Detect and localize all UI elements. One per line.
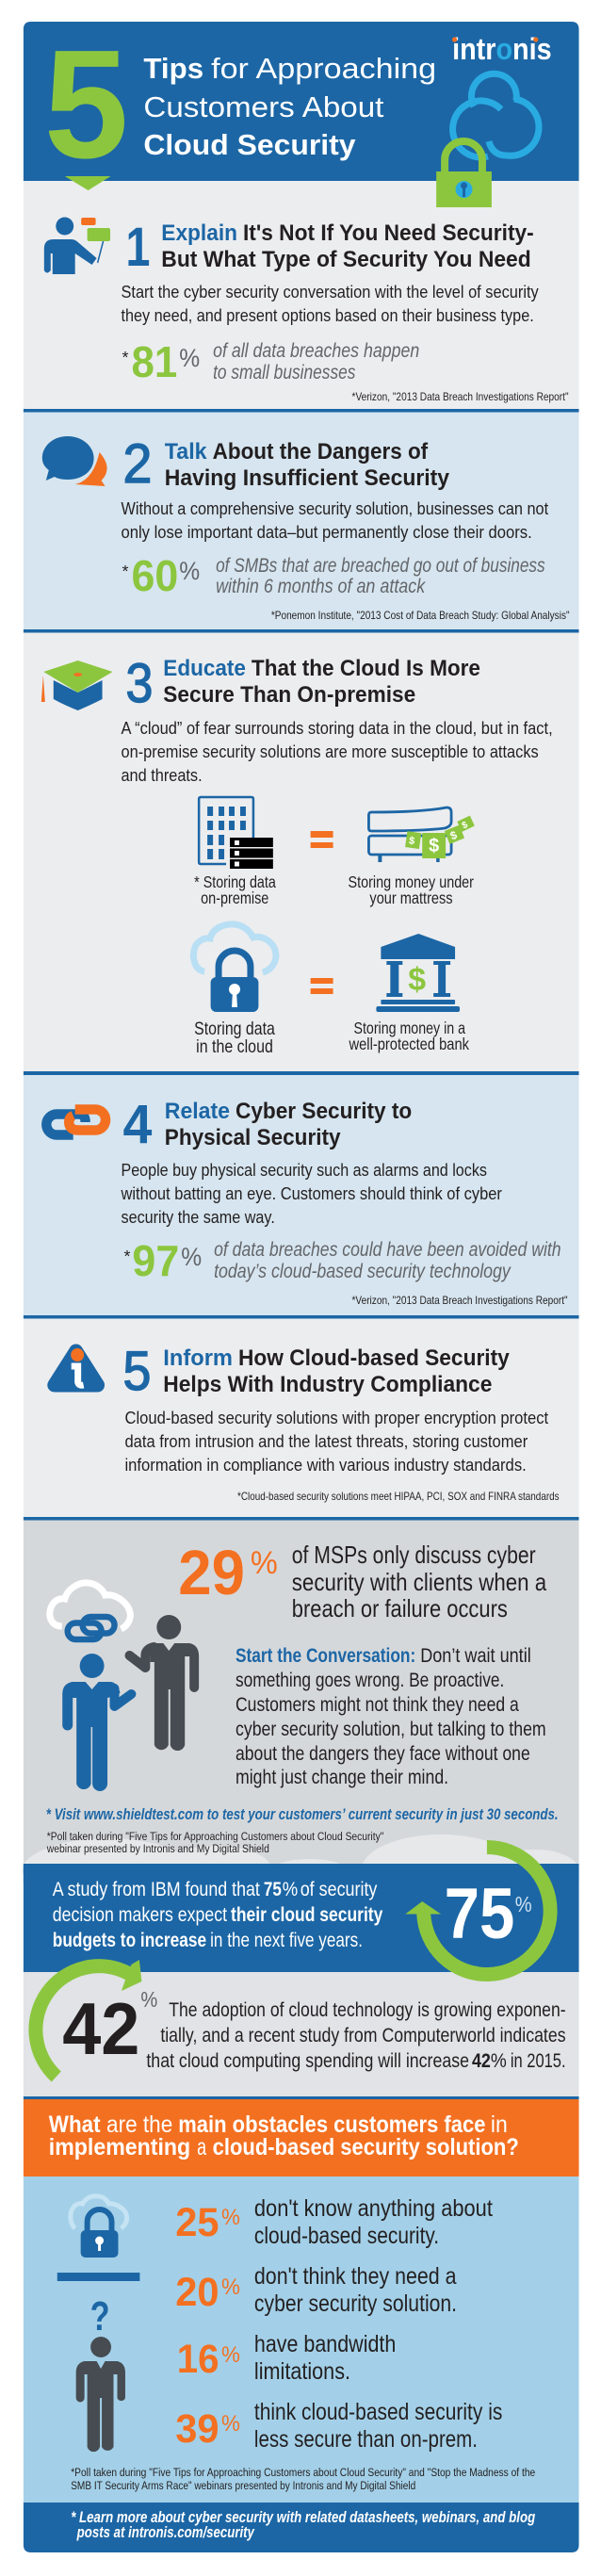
icon: cloud with padlock [193, 924, 276, 1012]
panel: tip 5 inform [24, 1315, 579, 1518]
icon: presenter with speech bubbles [44, 217, 110, 274]
text: start the conversation: Start the Conversation: [236, 1645, 415, 1667]
panel: tip 3 educate [24, 629, 579, 1071]
stat description: breach or failure occurs [292, 1596, 508, 1622]
number 3: 3 [125, 654, 153, 714]
citation: tip 5: *Cloud-based security solutions meet HIPAA, PCI, SOX and FINRA standards [237, 1492, 560, 1503]
stat: 75 percent: % [515, 1892, 532, 1916]
stat: 97 percent [123, 1236, 561, 1285]
stat: 81 percent: to small businesses [213, 362, 356, 383]
body text: tip 3 [121, 718, 553, 785]
stat: 29 percent: 29 [178, 1538, 245, 1608]
title: for Approaching [211, 52, 436, 85]
label: storing money in a bank [349, 1019, 469, 1053]
stat description: security with clients when a [292, 1570, 547, 1596]
big number 5: 5 [44, 18, 128, 190]
stat row: 20 percent: cyber security solution. [254, 2291, 457, 2317]
stat: 81 percent [122, 337, 419, 386]
stat row: 25 percent [175, 2195, 493, 2249]
body text: tip 5: Cloud-based security solutions with proper encryption protect [124, 1408, 548, 1427]
heading: tip 1: Explain [161, 220, 237, 246]
stat: 81 percent: * [122, 348, 128, 367]
text: IBM study: budgets to increase [53, 1930, 206, 1951]
number 4: 4 [122, 1095, 152, 1155]
icon: bank [376, 934, 460, 1012]
stat: 75 percent: 75 [445, 1874, 514, 1954]
text: computerworld study [146, 1999, 566, 2072]
stat row: 20 percent [175, 2263, 457, 2317]
text: computerworld study: in 2015. [511, 2050, 566, 2072]
text: IBM study: of security [300, 1879, 378, 1900]
body text: tip 4: security the same way. [121, 1207, 275, 1227]
text: start the conversation: about the dangers they face without one [236, 1743, 530, 1765]
heading: main obstacles question: in [491, 2111, 508, 2138]
panel: obstacles list [24, 2177, 579, 2503]
stat row: 25 percent: cloud-based security. [254, 2223, 439, 2249]
footnote: poll [46, 1830, 383, 1855]
text: computerworld study: 42 [472, 2050, 491, 2072]
icon: bank: $ [408, 962, 426, 998]
body text: tip 2: only lose important data–but permanently close their doors. [121, 522, 532, 542]
equals sign: cloud [311, 978, 333, 994]
heading: main obstacles question: are the [106, 2111, 172, 2138]
panel: IBM stat band [24, 1864, 579, 1972]
stat row: 20 percent: 20 [175, 2270, 219, 2315]
body text: tip 5 [124, 1408, 548, 1475]
title: About [302, 90, 384, 123]
icon: mattress with money: $ [429, 836, 439, 856]
footer call to action: posts at intronis.com/security [76, 2524, 255, 2541]
stat row: 25 percent: don't know anything about [254, 2195, 493, 2222]
citation: tip 4: *Verizon, "2013 Data Breach Investigations Report" [352, 1296, 568, 1307]
text: start the conversation: might just change their mind. [236, 1767, 448, 1788]
label: storing data on-premise [194, 872, 276, 907]
stat row: 16 percent: % [221, 2342, 240, 2368]
stat row: 20 percent: % [221, 2274, 240, 2300]
heading: main obstacles question: What [49, 2111, 101, 2138]
icon: cloud outline [453, 73, 539, 157]
body text: tip 2 [121, 498, 548, 542]
label: storing money in a bank: well-protected bank [349, 1035, 469, 1053]
stat row: 20 percent: don't think they need a [254, 2263, 457, 2290]
stat: 60 percent: within 6 months of an attack [216, 576, 426, 597]
divider bar [57, 2273, 139, 2281]
heading: tip 2: Talk [165, 439, 207, 465]
body text: tip 4 [121, 1160, 502, 1227]
stat row: 39 percent [175, 2399, 502, 2453]
text: computerworld study: % [491, 2050, 507, 2072]
heading: tip 1: It's Not If You Need Security- [243, 220, 534, 246]
text: computerworld study: that cloud computing spending will increase [146, 2050, 469, 2072]
stat row: 16 percent: have bandwidth [254, 2331, 396, 2357]
body text: tip 3: A “cloud” of fear surrounds storing data in the cloud, but in fact, [121, 718, 553, 738]
text: start the conversation: Don’t wait until [420, 1645, 531, 1667]
label: storing money in a bank: Storing money in a [353, 1019, 465, 1037]
stat: 81 percent: 81 [131, 337, 177, 386]
icon: mattress with money: $ [448, 828, 460, 842]
text: IBM study: 75 [264, 1879, 282, 1900]
text: IBM study: decision makers expect [53, 1904, 227, 1926]
heading: tip 5: Inform [163, 1345, 233, 1371]
panel: MSP conversation [23, 1517, 579, 1906]
heading: main obstacles question: cloud-based security solution? [213, 2134, 519, 2160]
label: storing data in the cloud: in the cloud [196, 1037, 273, 1057]
stat row: 39 percent: % [221, 2411, 240, 2437]
body text: tip 4: without batting an eye. Customers should think of cyber [121, 1183, 502, 1203]
label: storing money under mattress [349, 872, 474, 907]
icon: building with servers [199, 797, 273, 869]
icon: mattress with money: $ [408, 835, 415, 847]
stat row: 16 percent [177, 2331, 396, 2385]
body text: tip 3: on-premise security solutions are more susceptible to attacks [121, 742, 539, 761]
icon: chain link [46, 1110, 106, 1134]
heading: tip 3: Educate [163, 656, 246, 681]
text: IBM study: A study from IBM found that [53, 1879, 260, 1900]
equals sign: on-premise [311, 831, 333, 848]
stat: 29 percent: % [251, 1545, 278, 1581]
icon: mattress with money: $ [461, 820, 470, 831]
pointer triangle [65, 176, 111, 190]
stat description: of MSPs only discuss cyber [292, 1542, 536, 1569]
footnote: webinar poll [71, 2466, 536, 2492]
label: storing data on-premise: * Storing data [194, 872, 276, 891]
background clouds [23, 1834, 579, 1906]
body text: tip 3: and threats. [121, 765, 203, 785]
text: IBM study: % [283, 1879, 298, 1900]
stat: 97 percent: today’s cloud-based security technology [214, 1261, 512, 1282]
panel: tip 1 explain [24, 179, 579, 410]
footnote: webinar poll: SMB IT Security Arms Race" webinars presented by Intronis and My Digital Shield [71, 2479, 415, 2492]
heading: tip 5: Helps With Industry Compliance [163, 1372, 492, 1397]
label: storing data on-premise: on-premise [201, 889, 268, 907]
heading: tip 4: Cyber Security to [236, 1099, 412, 1124]
heading: main obstacles question: implementing [49, 2134, 190, 2160]
stat: 60 percent: 60 [131, 551, 178, 600]
stat: 81 percent: % [179, 344, 200, 372]
text: start the conversation: something goes wrong. Be proactive. [236, 1670, 504, 1691]
number 2: 2 [122, 434, 152, 495]
heading: tip 3: That the Cloud Is More [252, 656, 480, 681]
body text: tip 5: information in compliance with various industry standards. [124, 1455, 527, 1475]
stat: 60 percent [122, 551, 545, 600]
text: start the conversation: cyber security solution, but talking to them [236, 1719, 546, 1740]
heading: tip 4: Relate [165, 1099, 230, 1124]
heading: tip 4: Physical Security [165, 1125, 341, 1150]
body text: tip 1: Start the cyber security conversation with the level of security [121, 282, 539, 302]
panel: tip 4 relate [24, 1071, 579, 1316]
heading: tip 3 [163, 656, 480, 708]
icon: grey person [129, 1615, 199, 1751]
heading: tip 2: About the Dangers of [213, 439, 429, 465]
footnote: poll: *Poll taken during "Five Tips for Approaching Customers about Cloud Security" [47, 1830, 383, 1843]
text: start the conversation: Customers might not think they need a [236, 1694, 519, 1716]
heading: tip 2: Having Insufficient Security [165, 465, 450, 491]
stat: 81 percent: of all data breaches happen [213, 340, 419, 362]
citation: tip 2: *Ponemon Institute, "2013 Cost of Data Breach Study: Global Analysis" [271, 611, 570, 622]
title: Customers [143, 90, 295, 123]
label: storing data in the cloud [194, 1019, 275, 1057]
number 5: 5 [122, 1342, 151, 1402]
logo: intronis: intronis [452, 32, 552, 66]
icon: person [76, 2337, 125, 2452]
heading: tip 5 [163, 1345, 510, 1397]
footer panel [24, 2503, 579, 2552]
icon: blue person [62, 1654, 131, 1791]
icon: circular arrow 42 percent [36, 1960, 141, 2077]
stat row: 39 percent: 39 [175, 2406, 219, 2452]
stat row: 25 percent: % [221, 2205, 240, 2230]
body text: tip 2: Without a comprehensive security solution, businesses can not [121, 498, 548, 518]
text: IBM study: their cloud security [231, 1904, 383, 1926]
title: Tips [143, 52, 203, 85]
stat: 42 percent: % [140, 1987, 157, 2012]
title: Cloud Security [143, 128, 356, 161]
stat row: 16 percent: 16 [177, 2337, 219, 2382]
stat: 97 percent: 97 [132, 1236, 179, 1285]
stat: 97 percent: % [181, 1243, 202, 1271]
panel: tip 2 talk [24, 409, 579, 630]
heading: tip 3: Secure Than On-premise [163, 682, 415, 708]
icon: mattress with money [368, 807, 475, 862]
icon: cloud with chain link [50, 1583, 130, 1639]
body text: tip 1: they need, and present options based on their business type. [121, 305, 534, 325]
stat row: 39 percent: think cloud-based security is [254, 2399, 502, 2425]
stat row: 39 percent: less secure than on-prem. [254, 2426, 478, 2453]
body text: tip 4: People buy physical security such as alarms and locks [121, 1160, 487, 1180]
footnote: poll: webinar presented by Intronis and My Digital Shield [46, 1842, 269, 1855]
stat description [292, 1542, 547, 1622]
footnote: webinar poll: *Poll taken during "Five Tips for Approaching Customers about Cloud Security" and "Stop the Madness of the [71, 2466, 536, 2479]
body text: tip 1 [121, 282, 539, 325]
icon: circular arrow 75 percent [405, 1847, 550, 1974]
heading: main obstacles question [49, 2111, 519, 2160]
heading: main obstacles question: a [197, 2134, 206, 2160]
text: IBM study [53, 1879, 383, 1951]
icon: green padlock [436, 141, 492, 207]
text: start the conversation [236, 1645, 546, 1788]
icon: info triangle [55, 1348, 98, 1385]
heading: main obstacles question: main obstacles customers face [178, 2111, 486, 2138]
citation: tip 1: *Verizon, "2013 Data Breach Investigations Report" [352, 392, 569, 403]
stat: 60 percent: * [122, 562, 128, 580]
heading: tip 5: How Cloud-based Security [238, 1345, 510, 1371]
label: storing money under mattress: your mattress [369, 889, 453, 907]
text: IBM study: in the next five years. [210, 1930, 363, 1951]
heading: tip 1: But What Type of Security You Need [161, 247, 531, 272]
stat: 42 percent: 42 [62, 1989, 139, 2070]
header panel [24, 18, 579, 207]
heading: tip 1 [161, 220, 534, 272]
stat: 97 percent: * [123, 1247, 130, 1265]
label: storing money under mattress: Storing money under [349, 872, 474, 891]
panel: obstacles heading [24, 2096, 579, 2177]
stat: 60 percent: % [179, 557, 200, 585]
body text: tip 5: data from intrusion and the latest threats, storing customer [124, 1431, 528, 1451]
title [143, 52, 436, 161]
icon: graduation cap [41, 660, 113, 710]
footer call to action [71, 2509, 535, 2541]
heading: tip 4 [165, 1099, 412, 1150]
label: storing data in the cloud: Storing data [194, 1019, 275, 1039]
icon: small cloud with padlock [71, 2196, 127, 2258]
number 1: 1 [125, 218, 150, 278]
icon: question mark: ? [90, 2293, 110, 2340]
stat row: 25 percent: 25 [175, 2200, 219, 2245]
panel: computerworld stat band [24, 1972, 579, 2096]
stat row: 16 percent: limitations. [254, 2358, 350, 2385]
icon: speech bubbles [42, 436, 107, 486]
heading: tip 2 [165, 439, 450, 491]
